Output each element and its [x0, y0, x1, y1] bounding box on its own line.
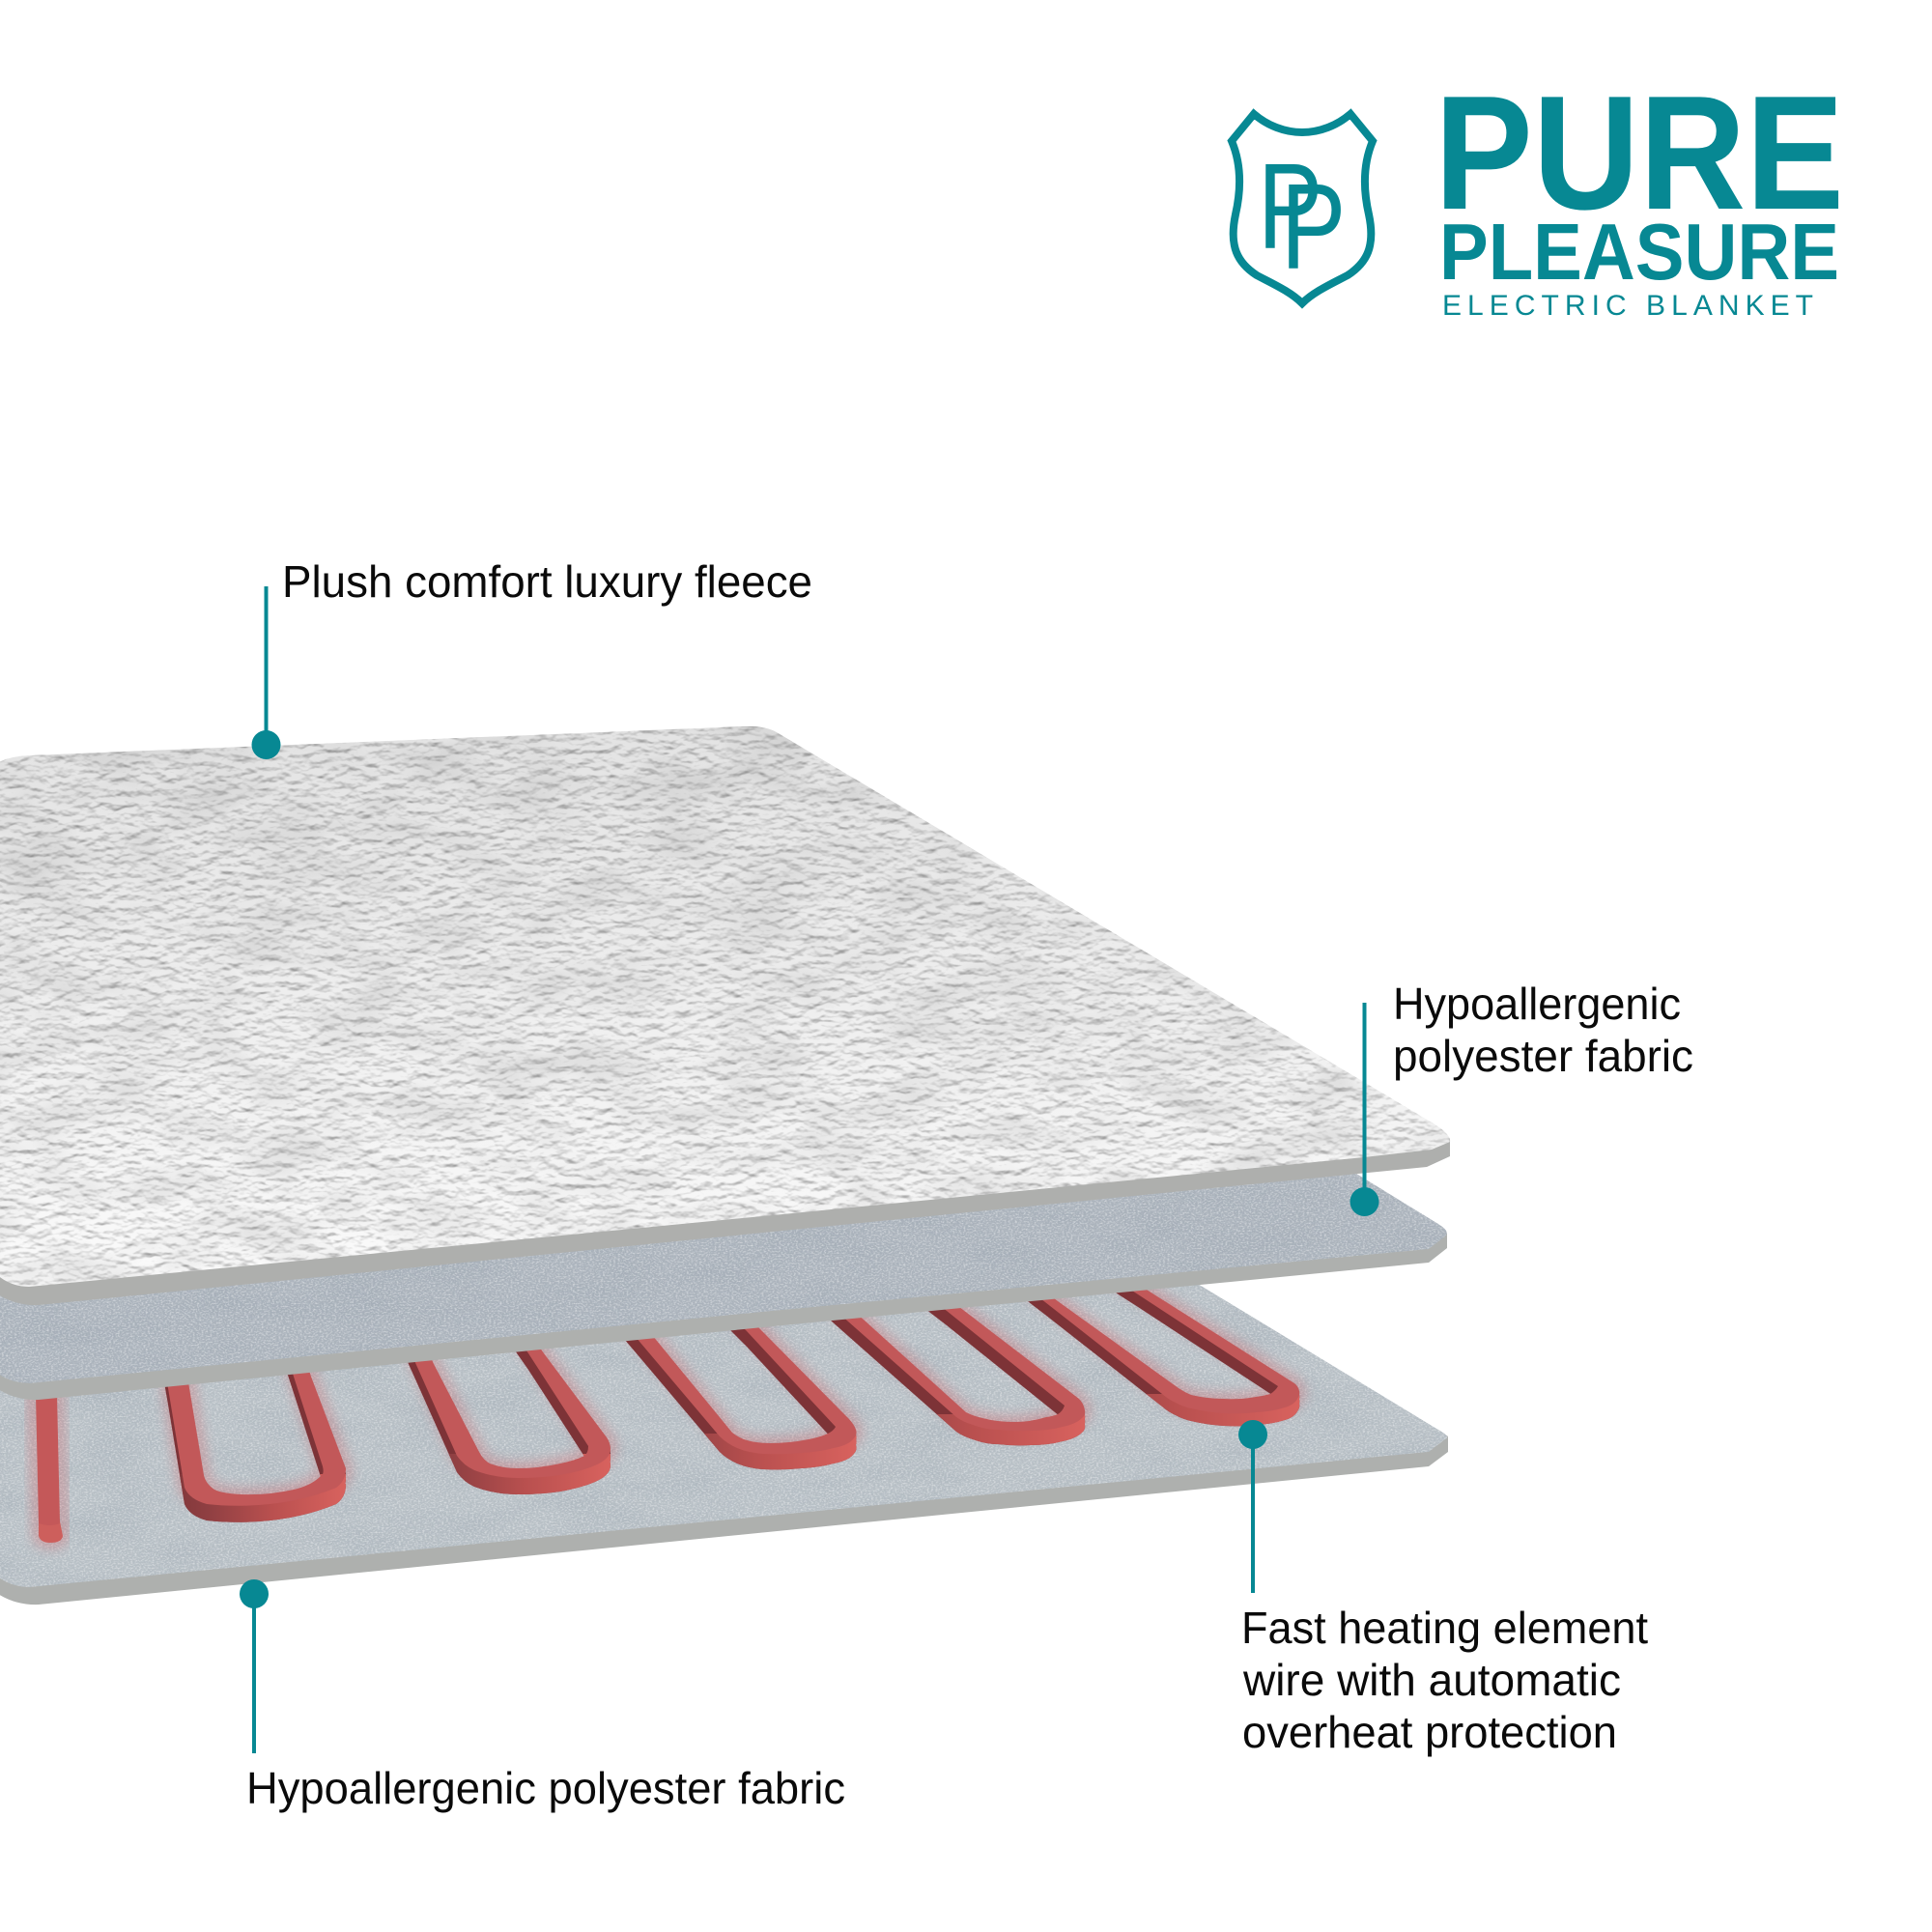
- callout: hypoallergenic polyester fabric, upper: polyester fabric: [1393, 1031, 1693, 1081]
- panel: blanket layer 2, polyester fabric: [0, 1159, 1447, 1400]
- logo wordmark: PLEASURE: PLEASURE: [1439, 207, 1839, 297]
- panel: blanket layer 1, plush fleece: [0, 726, 1450, 1305]
- chart: heating wire elements: [31, 1253, 1299, 1543]
- callout: hypoallergenic polyester fabric, lower: Hypoallergenic polyester fabric: [246, 1763, 845, 1813]
- logo tagline: ELECTRIC BLANKET: ELECTRIC BLANKET: [1442, 290, 1813, 322]
- wire: loop 5: [1028, 1289, 1309, 1426]
- wire: loop 1: [156, 1372, 355, 1522]
- callout: fast heating element wire: Fast heating element: [1241, 1603, 1648, 1653]
- callout: hypoallergenic polyester fabric, lower: [240, 1579, 845, 1813]
- callout: fast heating element wire: overheat protection: [1242, 1707, 1617, 1757]
- logo wordmark: PURE: PURE: [1435, 62, 1844, 243]
- callout: fast heating element wire: [1238, 1420, 1648, 1757]
- icon: PP shield: P: [1281, 159, 1346, 296]
- wire: loop 2: [405, 1349, 620, 1494]
- wire: stub end: [31, 1352, 63, 1543]
- callout: fast heating element wire: wire with automatic: [1242, 1655, 1621, 1705]
- callout: plush comfort luxury fleece: Plush comfort luxury fleece: [282, 556, 812, 607]
- wire: loop 4: [831, 1307, 1094, 1445]
- wire: loop 3: [626, 1327, 866, 1470]
- callout: hypoallergenic polyester fabric, upper: [1350, 979, 1693, 1216]
- icon: PP shield: [1232, 114, 1373, 303]
- logo: Pure Pleasure Electric Blanket: [1232, 62, 1844, 322]
- callout: plush comfort luxury fleece: [251, 556, 812, 759]
- icon: PP shield: P: [1258, 139, 1322, 275]
- callout: hypoallergenic polyester fabric, upper: Hypoallergenic: [1393, 979, 1681, 1029]
- panel: blanket layer 3, bottom polyester fabric: [0, 1159, 1448, 1605]
